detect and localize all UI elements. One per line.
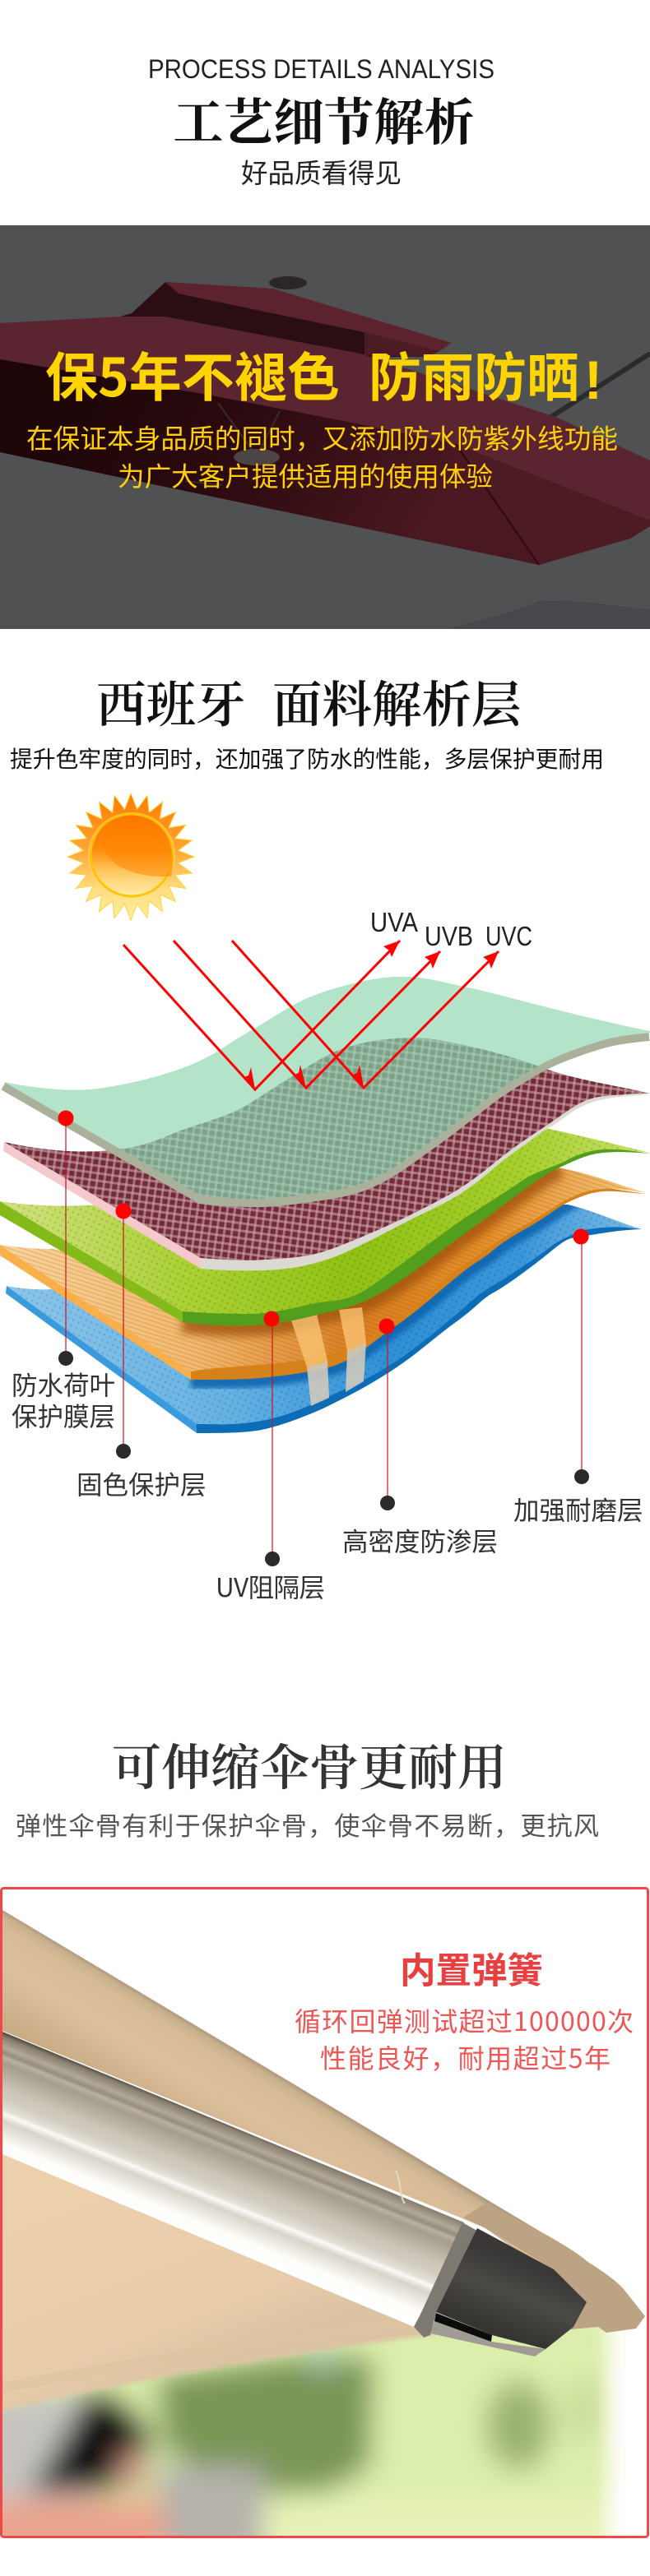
panel: umbrella photo banner bbox=[0, 225, 650, 629]
section title bbox=[96, 665, 522, 737]
spring description: 性能良好，耐用超过5年 bbox=[320, 2038, 611, 2076]
pole bbox=[547, 354, 650, 419]
banner description bbox=[26, 418, 618, 494]
main canopy bbox=[0, 317, 650, 565]
distant hill bbox=[448, 600, 650, 629]
callout: abrasion layer: 加强耐磨层 bbox=[513, 1490, 643, 1528]
section description: 弹性伞骨有利于保护伞骨，使伞骨不易断，更抗风 bbox=[16, 1806, 599, 1843]
callout: waterproof film layer bbox=[12, 1110, 115, 1434]
icon: sun bbox=[67, 793, 194, 920]
title: 工艺细节解析 bbox=[173, 83, 475, 155]
banner headline: ! bbox=[584, 349, 602, 410]
banner headline: 防雨防晒 bbox=[369, 336, 579, 412]
callout: seepage layer bbox=[342, 1319, 498, 1559]
subtitle: 好品质看得见 bbox=[241, 152, 402, 191]
lower fabric bbox=[2, 2154, 437, 2412]
callout: waterproof film layer: 保护膜层 bbox=[12, 1396, 115, 1434]
panel: retractable rib bbox=[0, 1729, 648, 2565]
blurred background bbox=[0, 2302, 617, 2565]
section title: 面料解析层 bbox=[272, 665, 522, 737]
callout: uv barrier layer: UV阻隔层 bbox=[216, 1567, 325, 1605]
upper canopy bbox=[120, 276, 452, 357]
banner description: 为广大客户提供适用的使用体验 bbox=[118, 456, 493, 494]
callout: uv barrier layer bbox=[216, 1311, 325, 1605]
layer: orange seepage layer bbox=[0, 1168, 646, 1380]
upper fabric bbox=[2, 1910, 645, 2333]
banner headline: 保5年不褪色 bbox=[45, 336, 340, 412]
panel: header bbox=[148, 54, 494, 191]
callout: waterproof film layer: 防水荷叶 bbox=[12, 1365, 115, 1403]
uv labels bbox=[370, 907, 532, 951]
aluminium rib bbox=[2, 2032, 464, 2327]
uv labels: UVC bbox=[485, 921, 532, 951]
layer: plaid colour-fix layer bbox=[3, 1038, 650, 1270]
layer: green uv barrier bbox=[0, 1128, 650, 1325]
panel: fabric layers bbox=[0, 665, 650, 1605]
spring description: 循环回弹测试超过100000次 bbox=[295, 2001, 634, 2039]
layer: clear waterproof film bbox=[2, 977, 650, 1207]
red uv arrows bbox=[123, 941, 499, 1089]
uv labels: UVA bbox=[370, 907, 418, 937]
fabric tip bbox=[463, 2204, 645, 2333]
banner description: 在保证本身品质的同时，又添加防水防紫外线功能 bbox=[26, 418, 618, 456]
callout: abrasion layer bbox=[513, 1228, 643, 1528]
translucent straps bbox=[290, 1307, 366, 1406]
section title: 可伸缩伞骨更耐用 bbox=[112, 1729, 507, 1800]
callout: colour-fix layer: 固色保护层 bbox=[77, 1464, 207, 1502]
section title: 西班牙 bbox=[96, 665, 245, 737]
uv labels: UVB bbox=[425, 921, 473, 951]
layer: blue abrasion layer bbox=[6, 1191, 645, 1433]
callout: colour-fix layer bbox=[77, 1204, 207, 1502]
banner headline bbox=[45, 336, 602, 412]
rib photo frame bbox=[0, 1888, 648, 2565]
callout: seepage layer: 高密度防渗层 bbox=[342, 1521, 498, 1559]
english heading: PROCESS DETAILS ANALYSIS bbox=[148, 54, 494, 84]
rib end cap bbox=[414, 2222, 477, 2338]
section description: 提升色牢度的同时，还加强了防水的性能，多层保护更耐用 bbox=[10, 742, 604, 775]
spring heading: 内置弹簧 bbox=[400, 1942, 543, 1994]
spring description bbox=[295, 2001, 634, 2076]
